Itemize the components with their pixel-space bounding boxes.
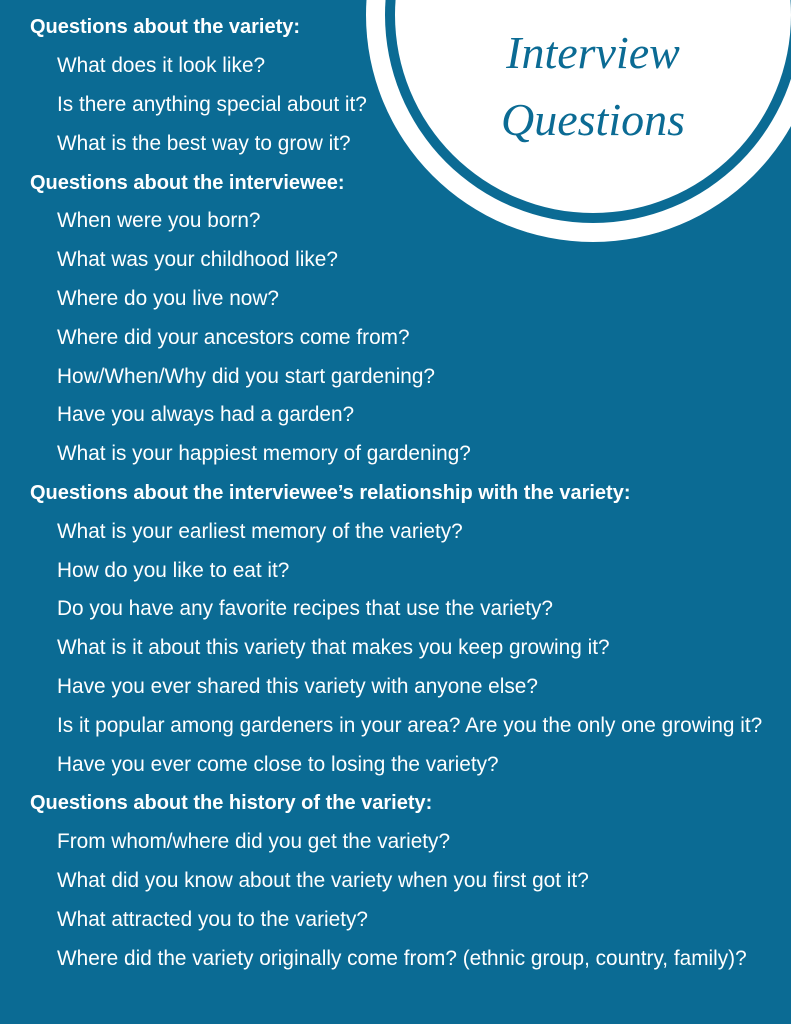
title: Questions	[501, 94, 685, 145]
questions list: What is it about this variety that makes you keep growing it?	[57, 636, 610, 659]
questions list: Where did the variety originally come from? (ethnic group, country, family)?	[57, 947, 747, 970]
questions list: Questions about the interviewee’s relationship with the variety:	[30, 482, 630, 504]
questions list: What did you know about the variety when you first got it?	[57, 869, 589, 892]
questions list: Questions about the variety:	[30, 16, 300, 38]
questions list: From whom/where did you get the variety?	[57, 830, 450, 853]
questions list: How do you like to eat it?	[57, 559, 289, 582]
questions list: Questions about the history of the variety:	[30, 792, 432, 814]
questions list: When were you born?	[57, 209, 260, 232]
title	[501, 27, 685, 145]
questions list: Is there anything special about it?	[57, 93, 367, 116]
questions list: Do you have any favorite recipes that use the variety?	[57, 597, 553, 620]
questions list: Where did your ancestors come from?	[57, 326, 410, 349]
questions list: Where do you live now?	[57, 287, 279, 310]
questions list: What was your childhood like?	[57, 248, 338, 271]
questions list: What is your happiest memory of gardening?	[57, 442, 471, 465]
questions list: Questions about the interviewee:	[30, 172, 345, 194]
questions list: What attracted you to the variety?	[57, 908, 368, 931]
questions list: Have you ever shared this variety with anyone else?	[57, 675, 538, 698]
title: Interview	[505, 27, 680, 78]
questions list: Have you ever come close to losing the variety?	[57, 753, 499, 776]
questions list: What does it look like?	[57, 54, 265, 77]
questions list: What is the best way to grow it?	[57, 132, 351, 155]
questions list: Is it popular among gardeners in your area? Are you the only one growing it?	[57, 714, 762, 737]
questions list: What is your earliest memory of the variety?	[57, 520, 463, 543]
questions list: How/When/Why did you start gardening?	[57, 365, 435, 388]
questions list: Have you always had a garden?	[57, 403, 354, 426]
